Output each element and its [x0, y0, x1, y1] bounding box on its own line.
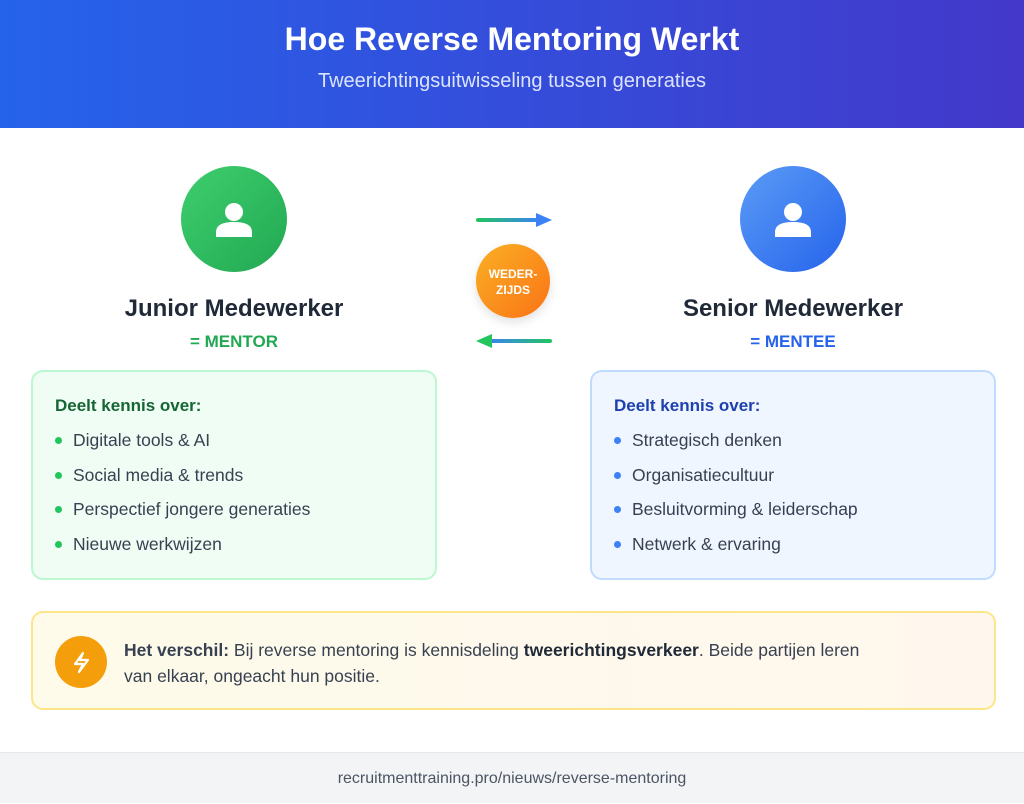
junior role: = MENTOR [190, 332, 278, 351]
senior name: Senior Medewerker [683, 295, 903, 322]
arrow: left [476, 334, 552, 348]
panel: junior knowledge [31, 370, 437, 580]
title: Hoe Reverse Mentoring Werkt [285, 21, 739, 57]
panel: senior knowledge [590, 370, 996, 580]
header [0, 0, 1024, 128]
callout text: Het verschil: Bij reverse mentoring is kennisdeling tweerichtingsverkeer. Beide partijen leren van elkaar, ongeacht hun positie. [124, 640, 859, 686]
panel: senior knowledge: Strategisch denken [632, 430, 782, 450]
panel: junior knowledge: Social media & trends [73, 464, 243, 484]
badge: wederzijds: WEDER- [489, 267, 537, 281]
footer [0, 752, 1024, 803]
panel: senior knowledge: Netwerk & ervaring [632, 534, 781, 554]
arrow: right [476, 213, 552, 227]
panel: junior knowledge: Perspectief jongere generaties [73, 499, 310, 519]
junior name: Junior Medewerker [125, 295, 343, 322]
panel: junior knowledge: Nieuwe werkwijzen [73, 534, 222, 554]
panel: junior knowledge: Digitale tools & AI [73, 430, 210, 450]
badge: wederzijds [476, 244, 550, 318]
senior heading: Deelt kennis over: [614, 396, 760, 415]
icon: senior avatar [740, 166, 846, 272]
senior role: = MENTEE [750, 332, 836, 351]
footer: recruitmenttraining.pro/nieuws/reverse-mentoring [338, 770, 686, 787]
subtitle: Tweerichtingsuitwisseling tussen generaties [318, 70, 706, 92]
callout: het verschil [31, 611, 996, 710]
panel: senior knowledge: Organisatiecultuur [632, 464, 774, 484]
junior heading: Deelt kennis over: [55, 396, 201, 415]
panel: senior knowledge: Besluitvorming & leiderschap [632, 499, 858, 519]
badge: wederzijds: ZIJDS [496, 283, 530, 297]
icon: junior avatar [181, 166, 287, 272]
icon: lightning [55, 636, 107, 688]
